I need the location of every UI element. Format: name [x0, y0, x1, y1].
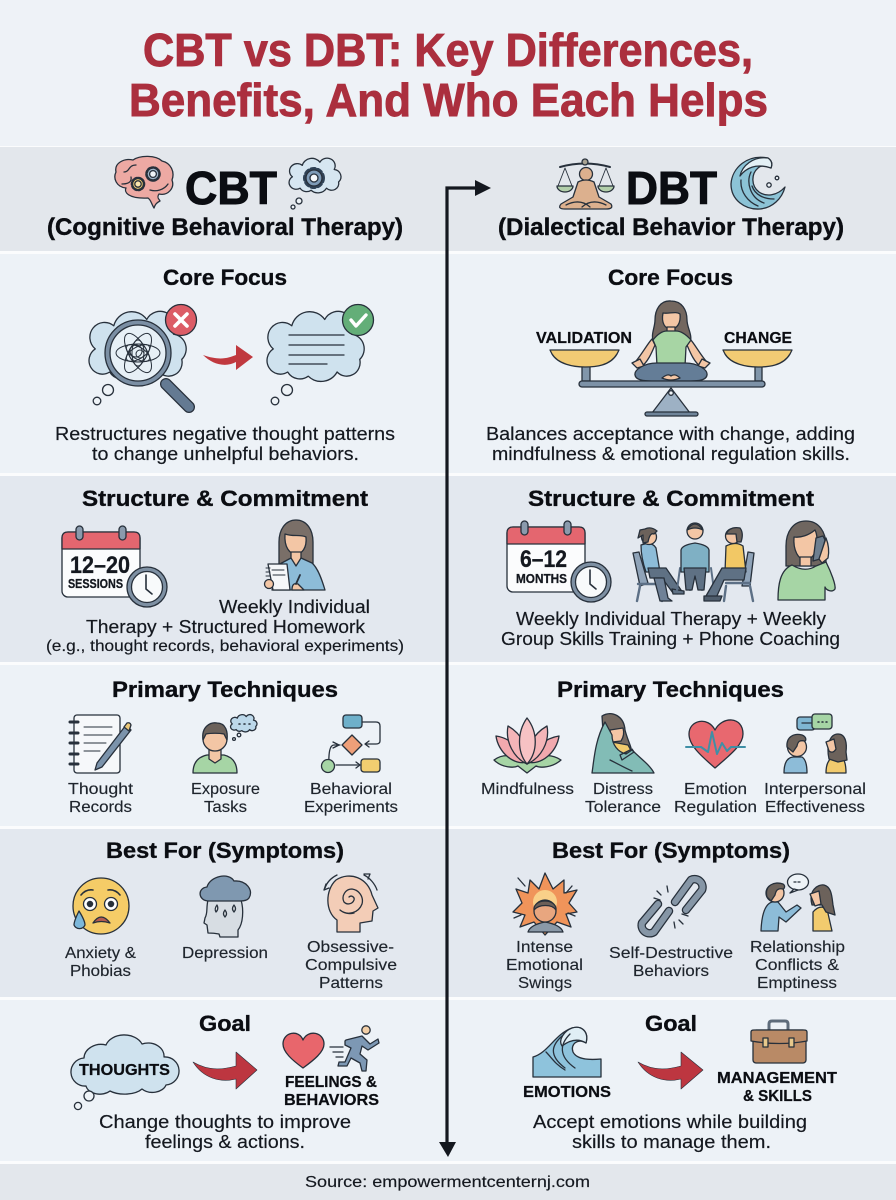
source: Source: empowermentcenternj.com [305, 1174, 590, 1191]
technique: emotion regulation [674, 720, 757, 816]
panel: DBT header [498, 157, 844, 241]
panel: CBT structure and commitment [46, 486, 404, 655]
label: Anxiety & [65, 945, 136, 962]
DBT full name: (Dialectical Behavior Therapy) [498, 214, 844, 241]
label: Depression [182, 945, 268, 962]
heading: Core Focus [163, 265, 287, 290]
label: Compulsive [305, 957, 397, 974]
centre chair and man [677, 568, 714, 590]
panel: CBT header [47, 156, 403, 241]
icon: briefcase labelled management and skills [717, 1021, 837, 1105]
label: Mindfulness [481, 781, 574, 798]
icon: calendar 12-20 sessions [62, 526, 167, 607]
icon: flowchart [322, 715, 380, 772]
description [99, 1112, 351, 1152]
icon: meditating figure with scales [557, 159, 614, 209]
DBT label: DBT [626, 162, 717, 214]
icon: calendar 12-20 sessions: 12–20 [70, 552, 130, 579]
icon: balance scale with meditating woman [550, 301, 792, 416]
label: Intense [516, 939, 573, 956]
description [533, 1112, 807, 1152]
symptom: obsessive-compulsive patterns [305, 874, 397, 992]
description: Weekly Individual Therapy + Weekly [516, 609, 826, 629]
label: Tasks [204, 799, 247, 816]
CBT full name: (Cognitive Behavioral Therapy) [47, 214, 403, 241]
technique: behavioral experiments [304, 715, 398, 816]
heading: Primary Techniques [557, 677, 784, 702]
right chair and man [742, 552, 754, 586]
description: Restructures negative thought patterns [55, 424, 395, 444]
icon: woman on phone [778, 521, 835, 600]
label: MANAGEMENT [717, 1070, 837, 1087]
icon: heart and runner [283, 1026, 379, 1109]
panel: CBT best for symptoms [65, 838, 397, 992]
technique: interpersonal effectiveness [764, 714, 866, 816]
description [501, 609, 840, 649]
panel: CBT primary techniques [68, 677, 398, 816]
icon: two people talking [784, 714, 847, 773]
description: mindfulness & emotional regulation skills. [492, 444, 850, 464]
icon: red cross badge [166, 304, 196, 336]
description [46, 597, 404, 655]
label: Experiments [304, 799, 398, 816]
technique: distress tolerance [585, 714, 661, 816]
icon: calendar 6-12 months [507, 521, 611, 602]
label: Conflicts & [755, 957, 839, 974]
label: Phobias [70, 963, 131, 980]
icon: magnifier over tangled thought [89, 311, 189, 407]
icon: thought cloud with gear [289, 158, 341, 209]
description: Balances acceptance with change, adding [486, 424, 855, 444]
label [506, 939, 583, 992]
label: Regulation [674, 799, 757, 816]
icon: lotus [494, 718, 561, 773]
label: Self-Destructive [609, 945, 733, 962]
icon: exploding head [513, 873, 577, 935]
symptom: relationship conflicts and emptiness [750, 874, 845, 992]
icon: ocean wave [731, 157, 785, 209]
icon: broken chain [642, 879, 703, 933]
icon: clear thought cloud [267, 304, 374, 405]
description: Weekly Individual [219, 597, 370, 617]
heading: Core Focus [608, 265, 733, 290]
symptom: self-destructive behaviors [609, 879, 733, 980]
description: (e.g., thought records, behavioral experiments) [46, 638, 404, 655]
label: Behavioral [310, 781, 392, 798]
icon: thoughts cloud [71, 1035, 179, 1110]
label: FEELINGS & [285, 1074, 377, 1091]
label: & SKILLS [743, 1088, 812, 1105]
title: Benefits, And Who Each Helps [129, 74, 768, 126]
label [304, 781, 398, 816]
heading: Structure & Commitment [528, 486, 815, 511]
description: Accept emotions while building [533, 1112, 807, 1132]
icon: heart with pulse [686, 720, 745, 768]
arrow: divider between columns [439, 180, 491, 1157]
panel: CBT goal [71, 1011, 379, 1152]
icon: calendar 6-12 months: MONTHS [516, 572, 567, 586]
icon: notebook and pen [70, 715, 131, 773]
panel: DBT core focus [486, 265, 855, 464]
arrow [193, 1052, 257, 1089]
label: Emotion [684, 781, 747, 798]
label [191, 781, 260, 816]
heading: Goal [645, 1011, 697, 1036]
label: Swings [518, 975, 572, 992]
icon: head with spiral [324, 874, 378, 932]
description: skills to manage them. [572, 1132, 771, 1152]
icon: wave labelled emotions [523, 1027, 611, 1101]
heading: Best For (Symptoms) [552, 838, 790, 863]
symptom: depression [182, 876, 268, 962]
label: Records [69, 799, 132, 816]
panel: DBT primary techniques [481, 677, 866, 816]
left chair [633, 552, 648, 586]
label [65, 945, 136, 980]
heading: Best For (Symptoms) [106, 838, 344, 863]
icon: group therapy [633, 523, 754, 601]
panel: DBT goal [523, 1011, 837, 1152]
description: feelings & actions. [145, 1132, 305, 1152]
label: Thought [68, 781, 134, 798]
description [55, 424, 395, 464]
icon: thoughts cloud: THOUGHTS [79, 1062, 170, 1079]
panel: CBT core focus [55, 265, 395, 464]
icon: calendar 12-20 sessions: SESSIONS [68, 577, 123, 591]
description: to change unhelpful behaviors. [92, 444, 359, 464]
label: Relationship [750, 939, 845, 956]
label: Emptiness [757, 975, 837, 992]
symptom: anxiety and phobias [65, 878, 136, 980]
description: Change thoughts to improve [99, 1112, 351, 1132]
description: Therapy + Structured Homework [86, 617, 366, 637]
icon: wave labelled emotions: EMOTIONS [523, 1084, 611, 1101]
label: Behaviors [633, 963, 709, 980]
label: validation: VALIDATION [536, 330, 632, 347]
label: change: CHANGE [724, 330, 792, 347]
technique: thought records [68, 715, 134, 816]
title band [0, 0, 896, 146]
technique: exposure tasks [191, 715, 260, 816]
label [750, 939, 845, 992]
icon: head under rain cloud [200, 876, 251, 937]
description [486, 424, 855, 464]
label [674, 781, 757, 816]
label [585, 781, 661, 816]
label: Distress [593, 781, 653, 798]
label [717, 1070, 837, 1105]
label [284, 1074, 379, 1109]
label: Emotional [506, 957, 583, 974]
arrow [203, 345, 253, 370]
label: Effectiveness [765, 799, 865, 816]
icon: couple arguing [761, 874, 835, 931]
technique: mindfulness [481, 718, 574, 798]
heading: Goal [199, 1011, 251, 1036]
icon: woman writing on notepad [264, 520, 325, 590]
heading: Structure & Commitment [82, 486, 369, 511]
label [764, 781, 866, 816]
symptom: intense emotional swings [506, 873, 583, 992]
CBT label: CBT [185, 162, 277, 214]
label: Patterns [319, 975, 383, 992]
icon: person with thought bubble [193, 715, 257, 773]
icon: brain with gears [115, 156, 173, 208]
description: Group Skills Training + Phone Coaching [501, 629, 840, 649]
panel: DBT structure and commitment [501, 486, 840, 649]
arrow [638, 1052, 703, 1089]
label [68, 781, 134, 816]
panel: DBT best for symptoms [506, 838, 845, 992]
title: CBT vs DBT: Key Differences, [143, 24, 753, 76]
label: Tolerance [585, 799, 661, 816]
label: BEHAVIORS [284, 1092, 379, 1109]
icon: anxious face [73, 878, 129, 934]
label: Interpersonal [764, 781, 866, 798]
title [129, 24, 768, 126]
icon: calendar 6-12 months: 6–12 [520, 546, 567, 573]
label [305, 939, 397, 992]
icon: person in blanket [592, 714, 654, 773]
label: Obsessive- [307, 939, 394, 956]
heading: Primary Techniques [112, 677, 338, 702]
label [609, 945, 733, 980]
label: Exposure [191, 781, 260, 798]
